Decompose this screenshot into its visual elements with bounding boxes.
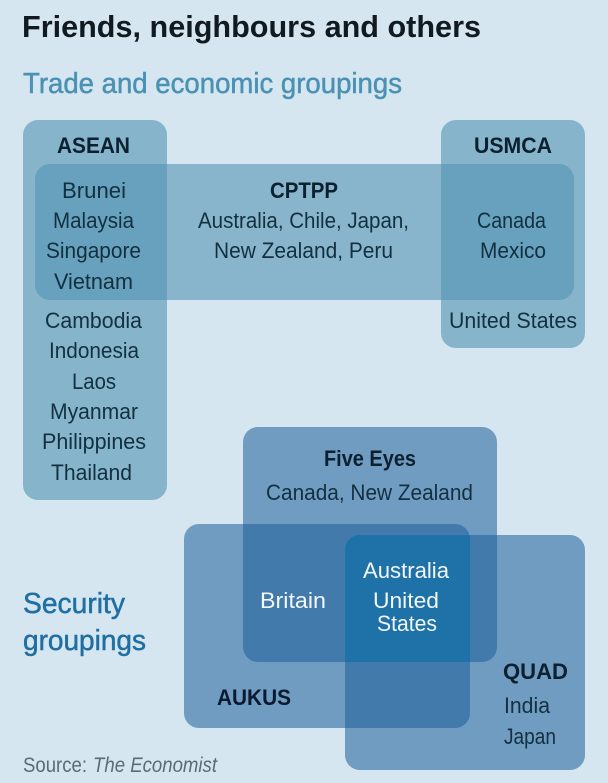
CPTPP group text <box>198 178 409 263</box>
panel: Five Eyes box <box>243 427 497 662</box>
source note: Source: <box>23 754 87 777</box>
shared members text: United <box>373 588 439 613</box>
shared members text: Australia <box>363 558 450 583</box>
ASEAN group text: Laos <box>72 369 116 394</box>
panel: USMCA box <box>441 120 585 348</box>
heading: trade and economic groupings: Trade and economic groupings <box>23 68 402 100</box>
Five Eyes group text <box>266 446 473 505</box>
ASEAN group text: Malaysia <box>53 208 135 233</box>
CPTPP group text: Australia, Chile, Japan, <box>198 208 409 233</box>
ASEAN label: ASEAN <box>57 133 130 158</box>
QUAD label: QUAD <box>503 659 568 684</box>
ASEAN group text: Singapore <box>46 238 141 263</box>
AUKUS label: AUKUS <box>217 685 291 710</box>
shared members text <box>260 558 450 636</box>
ASEAN group text: Cambodia <box>45 308 143 333</box>
USMCA group text: Canada <box>477 208 547 233</box>
USMCA group text <box>449 133 577 333</box>
ASEAN group text: Brunei <box>62 178 126 203</box>
heading: security groupings: Security <box>23 588 125 620</box>
QUAD group text <box>503 659 568 749</box>
panel: QUAD box <box>345 535 585 770</box>
QUAD group text: India <box>504 693 551 718</box>
ASEAN group text: Myanmar <box>50 399 138 424</box>
ASEAN group text: Philippines <box>42 429 146 454</box>
shared members text: Britain <box>260 588 326 613</box>
USMCA group text: Mexico <box>480 238 546 263</box>
panel: ASEAN box <box>23 120 167 500</box>
panel: AUKUS box <box>184 524 470 728</box>
panel: CPTPP box <box>35 164 574 300</box>
CPTPP label: CPTPP <box>270 178 338 203</box>
QUAD group text: Japan <box>504 724 556 749</box>
ASEAN group text: Indonesia <box>49 338 140 363</box>
CPTPP group text: New Zealand, Peru <box>214 238 393 263</box>
triple overlap: Five Eyes, AUKUS and QUAD <box>345 535 470 662</box>
heading: security groupings <box>23 588 146 657</box>
shared members text: States <box>377 611 437 636</box>
USMCA group text: United States <box>449 308 577 333</box>
ASEAN group text <box>42 133 146 485</box>
ASEAN group text: Thailand <box>51 460 132 485</box>
heading: security groupings: groupings <box>23 625 146 657</box>
source note: The Economist <box>93 754 218 777</box>
ASEAN group text: Vietnam <box>54 269 133 294</box>
source note <box>23 754 218 777</box>
USMCA label: USMCA <box>474 133 552 158</box>
title: Friends, neighbours and others <box>22 9 481 44</box>
Five Eyes group text: Canada, New Zealand <box>266 480 473 505</box>
Five Eyes label: Five Eyes <box>324 446 416 471</box>
